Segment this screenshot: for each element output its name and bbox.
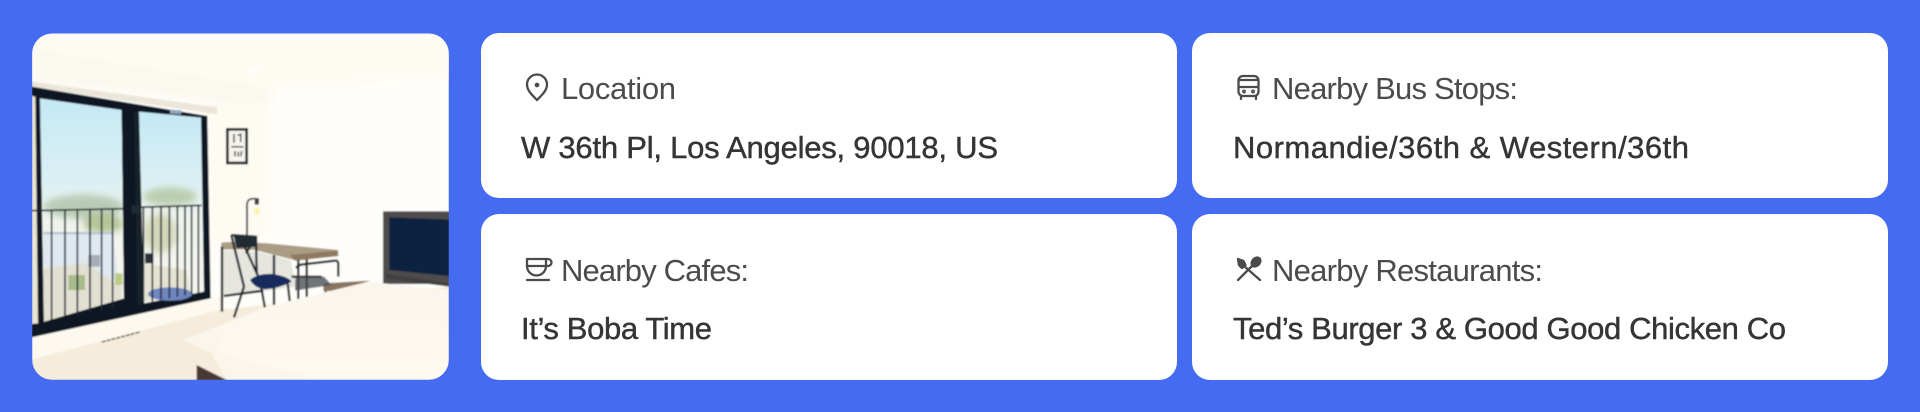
photo: bedroom with balcony window, desk and bed [32,33,449,380]
label: Nearby Cafes: Nearby Cafes: [561,253,749,288]
icon: coffee cup [527,259,552,280]
card: Nearby Cafes [481,214,1177,380]
value: address: W 36th Pl, Los Angeles, 90018, US [521,130,998,165]
label: Nearby Bus Stops: Nearby Bus Stops: [1272,71,1518,106]
label: Nearby Restaurants: Nearby Restaurants: [1272,253,1543,288]
icon: bus [1238,76,1258,99]
card: Location [481,33,1177,198]
value: restaurants: Ted’s Burger 3 & Good Good Chicken Co [1233,311,1786,346]
icon: map pin [527,74,547,100]
value: bus stops: Normandie/36th & Western/36th [1233,130,1689,165]
icon: crossed fork and spoon [1238,256,1262,280]
card: Nearby Restaurants [1192,214,1888,380]
value: cafes: It’s Boba Time [521,311,712,346]
label: Location: Location [561,71,676,106]
card: Nearby Bus Stops [1192,33,1888,198]
